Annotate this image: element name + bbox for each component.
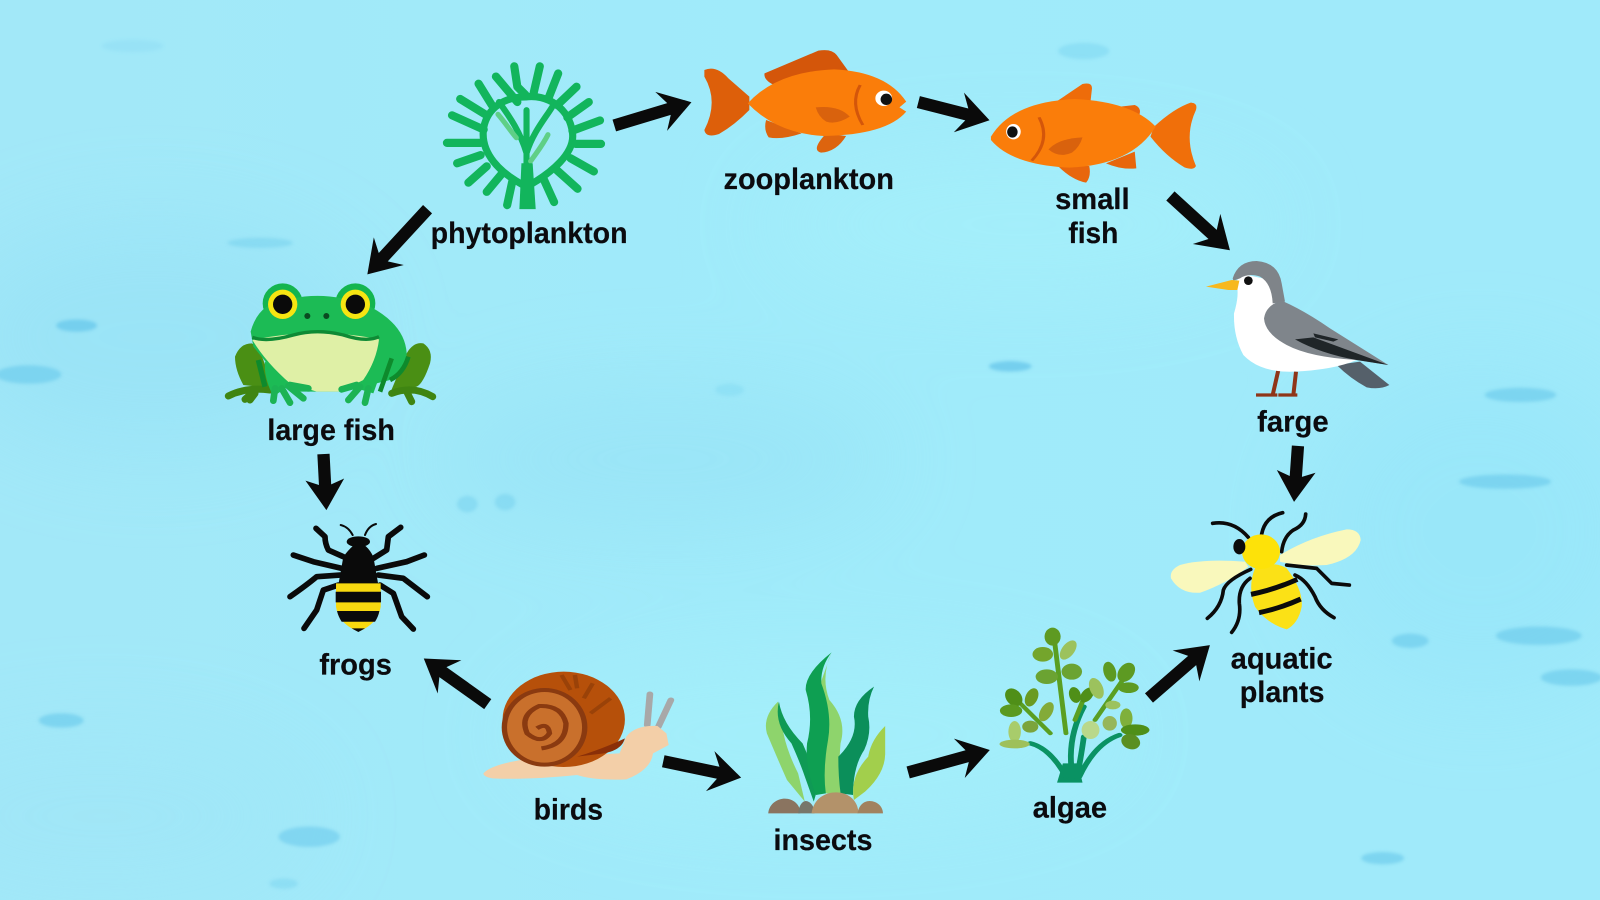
- icon: orange fish facing right: [704, 50, 906, 153]
- label: aquatic plants: plants: [1240, 676, 1324, 709]
- arrow: large fish to frogs: [304, 453, 346, 511]
- icon: yellow bee: [1171, 513, 1361, 632]
- node: aquatic plants: [1171, 513, 1361, 709]
- label: aquatic plants: aquatic: [1231, 642, 1333, 675]
- arrow: phytoplankton to large fish: [352, 195, 443, 288]
- arrow: insects to algae: [903, 730, 995, 792]
- label: large fish: large fish: [267, 414, 395, 447]
- arrow: farge to aquatic plants: [1275, 445, 1317, 503]
- node: insects: [766, 652, 885, 857]
- label: farge: farge: [1257, 406, 1329, 439]
- arrow: zooplankton to small fish: [913, 82, 995, 140]
- node: large fish: [228, 283, 433, 447]
- label: small fish: small: [1055, 183, 1130, 216]
- node: frogs: [290, 524, 427, 681]
- arrow: phytoplankton to zooplankton: [608, 83, 697, 145]
- arrow: small fish to farge: [1157, 181, 1244, 265]
- label: phytoplankton: phytoplankton: [431, 217, 628, 250]
- label: frogs: frogs: [319, 648, 392, 681]
- arrow: birds to frogs: [412, 642, 500, 721]
- node: small fish: [991, 83, 1196, 250]
- label: algae: algae: [1033, 791, 1107, 824]
- icon: orange fish facing left: [991, 83, 1196, 183]
- arrow: birds to insects: [659, 741, 745, 798]
- label: insects: insects: [773, 824, 872, 857]
- icon: snail with spiral shell: [483, 672, 671, 780]
- label: zooplankton: zooplankton: [723, 163, 894, 196]
- node: zooplankton: [704, 50, 906, 196]
- icon: green frog: [228, 283, 433, 403]
- node: phytoplankton: [431, 66, 628, 250]
- icon: black and yellow beetle: [290, 524, 427, 632]
- arrow: algae to aquatic plants: [1136, 630, 1223, 713]
- node: algae: [999, 628, 1149, 824]
- node: birds: [483, 672, 671, 826]
- label: small fish: fish: [1068, 217, 1118, 250]
- icon: grey and white bird: [1206, 261, 1389, 395]
- icon: phytoplankton branching plant: [447, 66, 601, 209]
- label: birds: birds: [534, 793, 603, 826]
- icon: branching green algae: [999, 628, 1149, 783]
- icon: seaweed on rocks: [766, 652, 885, 813]
- node: farge: [1206, 261, 1389, 439]
